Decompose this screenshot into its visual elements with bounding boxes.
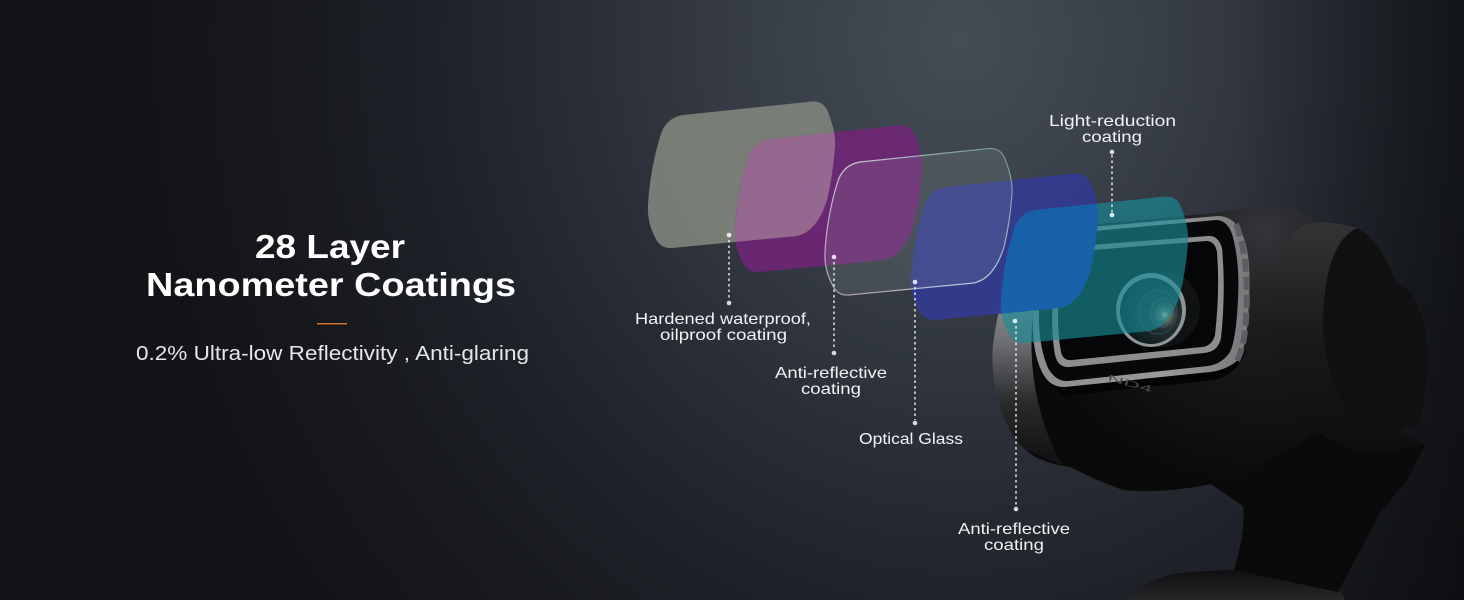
motor cap — [1323, 228, 1428, 432]
callout: light-reduction: coating — [1082, 129, 1142, 146]
callout: optical glass — [859, 280, 963, 448]
callout: anti-reflective upper: coating — [801, 381, 861, 398]
camera body — [1010, 206, 1340, 491]
callout: optical glass: Optical Glass — [859, 431, 963, 448]
callout: anti-reflective lower: coating — [984, 537, 1044, 554]
panel: blue coating — [911, 173, 1098, 320]
callout: anti-reflective lower — [958, 319, 1070, 554]
title: 28 Layer — [255, 228, 405, 265]
orange divider — [317, 323, 347, 324]
panel: grey hardened coating — [648, 101, 835, 248]
subtitle: 0.2% Ultra-low Reflectivity , Anti-glaring — [136, 342, 529, 365]
camera motor housing — [1270, 222, 1428, 452]
body left edge highlight — [992, 258, 1062, 465]
callout: anti-reflective upper: Anti-reflective — [775, 365, 887, 382]
title — [146, 228, 516, 303]
callout: hardened waterproof — [635, 233, 811, 344]
callout: light-reduction — [1049, 113, 1176, 217]
camera arm — [1205, 420, 1425, 592]
label: ND4: ND4 — [1106, 372, 1153, 395]
callout: light-reduction: Light-reduction — [1049, 113, 1176, 130]
callout: hardened waterproof: Hardened waterproof, — [635, 311, 811, 328]
panel: purple anti-reflective coating — [735, 125, 922, 272]
lens — [1116, 271, 1200, 347]
panel: teal light-reduction coating — [1001, 196, 1188, 343]
lens frame — [1033, 216, 1250, 396]
callout: anti-reflective lower: Anti-reflective — [958, 521, 1070, 538]
panel: grey and purple overlap — [735, 132, 836, 242]
camera gimbal — [992, 206, 1428, 600]
panel: optical glass — [825, 148, 1012, 295]
title: Nanometer Coatings — [146, 266, 516, 303]
panel: blue and teal overlap — [1001, 204, 1098, 314]
callout: anti-reflective upper — [775, 255, 887, 398]
camera base — [1125, 570, 1345, 600]
callout: hardened waterproof: oilproof coating — [660, 327, 787, 344]
